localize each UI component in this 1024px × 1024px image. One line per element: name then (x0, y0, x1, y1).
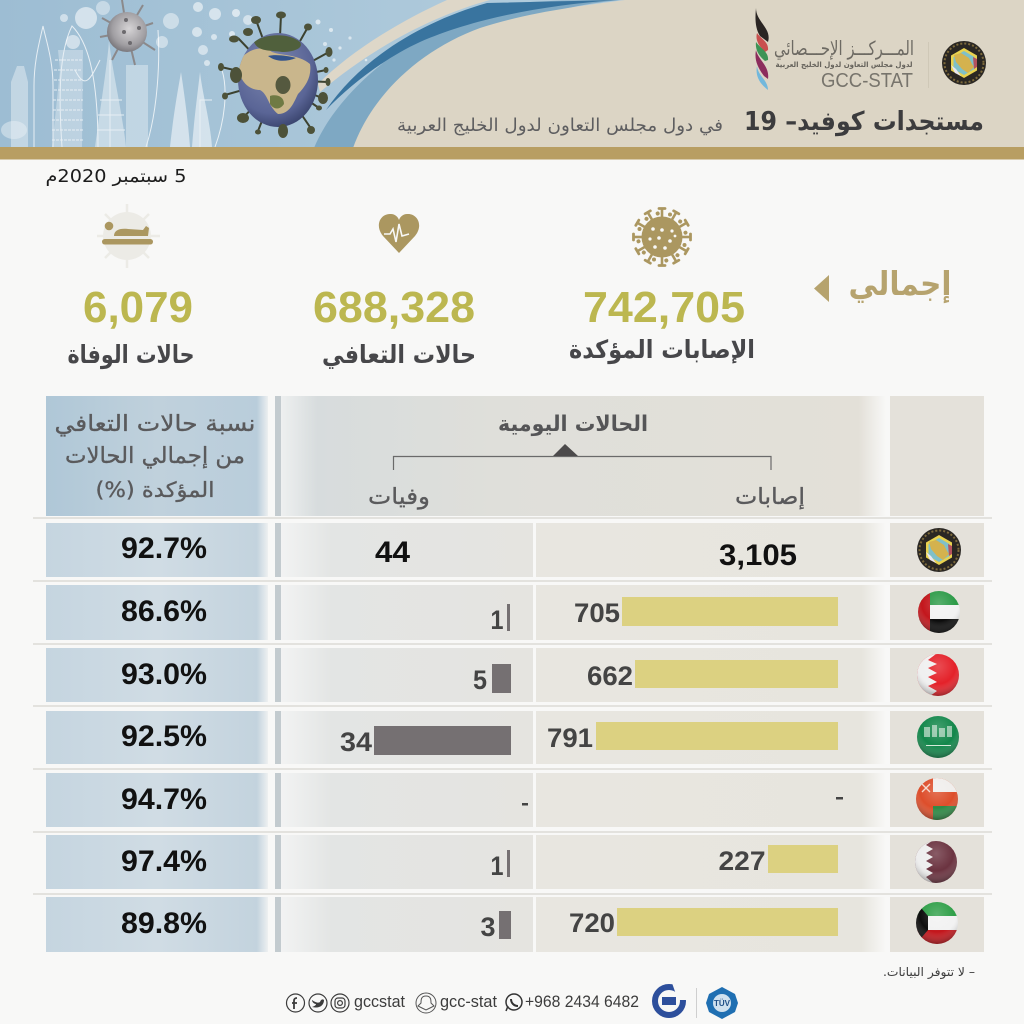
icon: virus (632, 207, 692, 267)
ribbon (755, 8, 769, 90)
skyline decoration (1, 26, 225, 147)
deaths value: no data (522, 803, 528, 806)
cases value and bar: 227 (718, 846, 766, 876)
icon: GCC emblem (917, 528, 961, 572)
header: flag column (890, 396, 984, 516)
percent: 93.0% (121, 658, 207, 691)
icon: whatsapp (506, 994, 522, 1011)
logo Arabic subtitle: لدول مجلس التعاون لدول الخليج العربية (776, 60, 913, 69)
dark blue swoosh (326, 0, 618, 110)
deaths value and bar (340, 726, 511, 757)
arrow (814, 275, 829, 302)
flag: Bahrain (917, 654, 959, 696)
cases value and bar (569, 908, 838, 938)
divider (696, 988, 697, 1018)
header: daily cases column (281, 396, 886, 516)
label: حالات التعافي (322, 340, 476, 369)
handle: gccstat (354, 992, 405, 1011)
deaths value and bar (473, 664, 511, 695)
flag: Qatar (915, 841, 957, 883)
icon: patient on bed over faded virus (97, 204, 160, 268)
footer contacts (286, 983, 738, 1019)
cases value: no data (836, 797, 843, 800)
footnote: – لا تتوفر البيانات. (883, 965, 975, 980)
title: مستجدات كوفيد– 19 (744, 107, 984, 137)
row: Kuwait (46, 897, 984, 952)
date: 5 سبتمبر 2020م (46, 167, 186, 187)
row: UAE (46, 585, 984, 640)
percent: 97.4% (121, 845, 207, 878)
logo: ISO certification (655, 983, 687, 1015)
logo Arabic name: المـــركـــز الإحـــصائي (774, 37, 914, 60)
icon: heart with pulse (379, 214, 419, 253)
value: 688,328 (313, 283, 475, 332)
flag: Kuwait (916, 902, 958, 944)
value: 742,705 (583, 283, 745, 332)
logo: GCC-STAT (755, 8, 914, 92)
header: recovery rate column (46, 396, 268, 516)
label: الإصابات المؤكدة (569, 335, 755, 365)
row: Saudi Arabia (46, 711, 984, 764)
daily cases: 3,105 (719, 539, 797, 572)
flag: Oman (916, 778, 958, 820)
phone number: +968 2434 6482 (525, 992, 639, 1011)
row: Oman (46, 773, 984, 827)
deaths value and bar: 3 (480, 912, 496, 942)
icon: globe with virus spikes (218, 12, 332, 138)
percent: 86.6% (121, 595, 207, 628)
section heading: total (814, 264, 952, 304)
stat: deaths (68, 204, 194, 370)
section heading: total: إجمالي (848, 264, 952, 304)
logo GCC-STAT: GCC-STAT (821, 70, 913, 92)
daily deaths: 44 (375, 536, 410, 569)
cases value and bar (547, 722, 838, 753)
flag: Saudi Arabia (917, 716, 959, 758)
cases value and bar (587, 660, 838, 691)
icon: snapchat (416, 993, 436, 1013)
stat: confirmed cases (569, 207, 755, 365)
row: Bahrain (46, 648, 984, 702)
header: daily cases column: إصابات (735, 484, 805, 510)
cases value and bar: 791 (547, 723, 593, 753)
percent: 89.8% (121, 907, 207, 940)
icon: GCC emblem (942, 41, 986, 85)
value: 6,079 (83, 283, 193, 332)
bubbles network decoration (60, 1, 367, 66)
cases value and bar (718, 845, 838, 876)
label: حالات الوفاة (68, 340, 194, 370)
header: recovery rate column: نسبة حالات التعافي (54, 411, 256, 437)
deaths value and bar: 1 (490, 851, 504, 881)
tan main panel (353, 0, 1024, 148)
cases value and bar (574, 597, 838, 628)
header: recovery rate column: من إجمالي الحالات (65, 443, 245, 469)
light tan swoosh (318, 0, 490, 92)
cases value and bar: 662 (587, 661, 633, 691)
row: GCC total (46, 523, 984, 577)
cases value and bar: 720 (569, 908, 615, 938)
percent: 94.7% (121, 783, 207, 816)
deaths value and bar (480, 911, 511, 942)
stat: recoveries (313, 214, 476, 369)
icon: grey virus (100, 0, 155, 65)
header: daily cases column: الحالات اليومية (498, 412, 648, 437)
table header (46, 396, 984, 516)
deaths value and bar: 5 (473, 665, 487, 695)
subtitle: في دول مجلس التعاون لدول الخليج العربية (397, 116, 723, 136)
flag: UAE (918, 591, 960, 633)
header: divider (275, 396, 281, 516)
gold band (0, 147, 1024, 160)
snapchat handle: gcc-stat (440, 992, 497, 1011)
cases value and bar: 705 (574, 598, 620, 628)
header: daily cases column: وفيات (368, 484, 430, 510)
deaths value and bar: 1 (490, 605, 504, 635)
logo: TUV: TÜV (714, 999, 731, 1008)
header: recovery rate column: المؤكدة (%) (96, 478, 214, 502)
percent: 92.5% (121, 720, 207, 753)
blue swoosh (314, 0, 620, 148)
percent: 92.7% (121, 532, 207, 565)
row lines (33, 517, 992, 895)
divider strip in logo (928, 42, 929, 88)
header banner (0, 0, 1024, 148)
row: Qatar (46, 835, 984, 889)
deaths value and bar: 34 (340, 727, 372, 757)
logo: TUV (706, 987, 738, 1019)
icons: social media (286, 994, 349, 1012)
